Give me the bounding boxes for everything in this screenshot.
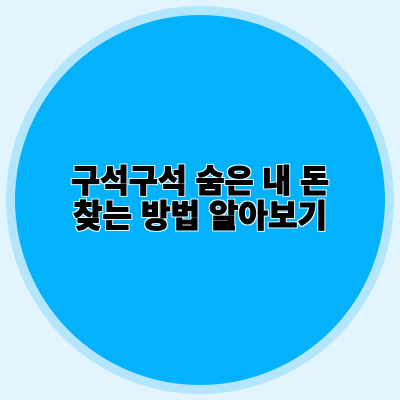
title: 찾는 방법 알아보기 <box>73 198 327 234</box>
title: 구석구석 숨은 내 돈 <box>71 163 329 199</box>
title <box>71 163 329 234</box>
